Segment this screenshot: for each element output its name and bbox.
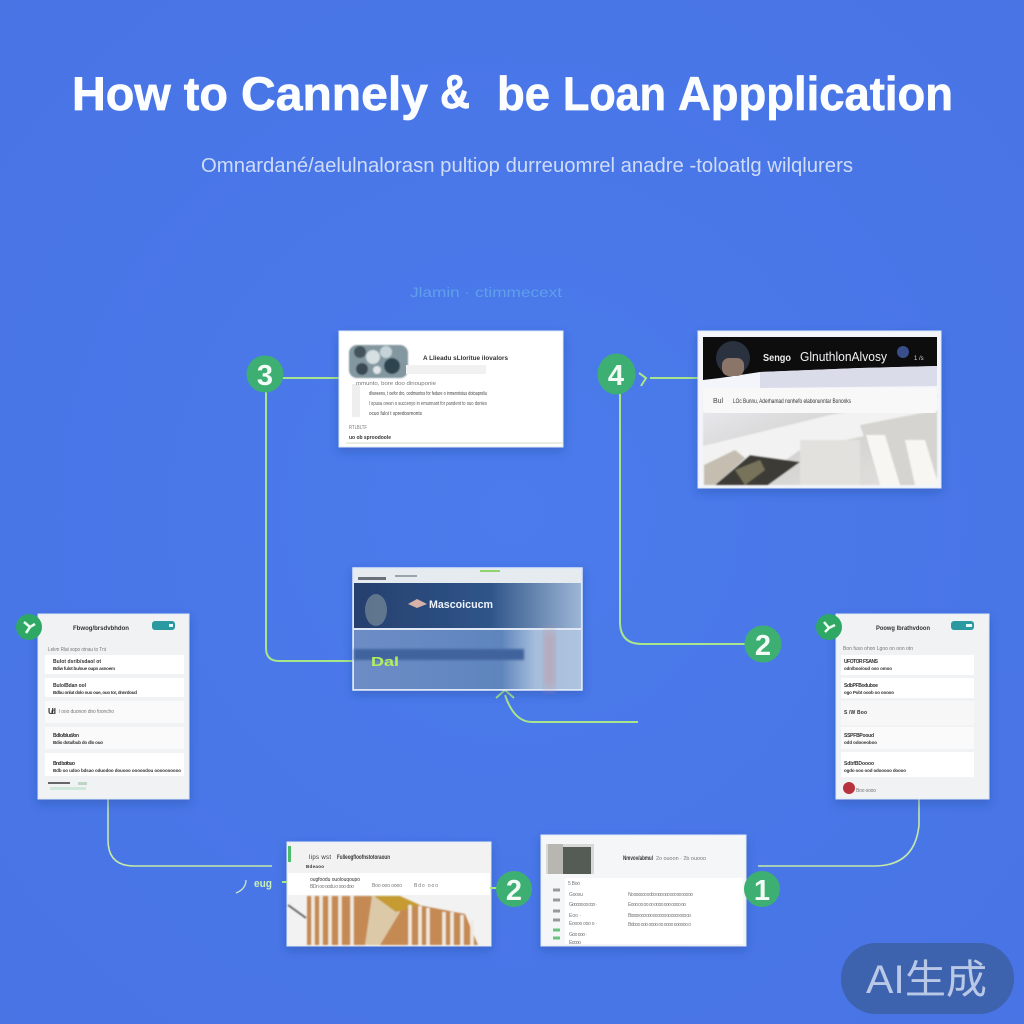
panel: bottom right table [541, 835, 746, 946]
rows [45, 655, 184, 790]
form rows: dloweens, t oefor dro, oodmuntos for fedure o inmenntoius dotoaproliu [369, 391, 487, 397]
green scribble label: Dal [371, 654, 399, 669]
text strip: LOc Bunnu, Aderhamad nonhefo elabonunntar Bononks [733, 398, 852, 405]
striped photo [288, 896, 478, 945]
step badge 2 bottom: 2 [506, 875, 522, 907]
header [843, 621, 974, 652]
table: Goosu [569, 892, 583, 898]
form rows [349, 381, 487, 441]
step badge 2 right: 2 [755, 630, 771, 662]
title: & [440, 65, 470, 118]
step badge 4 [598, 354, 646, 394]
rows: SdbfBDoooo [844, 761, 874, 767]
panel: right checklist [836, 614, 989, 799]
check badge right [816, 614, 842, 640]
header: Fulleogfloofnstotoraoun [337, 855, 390, 861]
AI badge: AI生成 [866, 958, 987, 1002]
title: be [497, 67, 550, 120]
panel: left checklist [38, 614, 189, 799]
step badge 3 [246, 356, 284, 392]
table: 5 Boo [568, 881, 580, 887]
panel: step 3 form [339, 331, 563, 447]
dark banner [703, 337, 937, 388]
form rows: l opusa oresn o succenyo in emunnant for pandent to ouo dontes [369, 401, 487, 407]
info strip: BDn oo oodu o ooo doo [310, 884, 354, 890]
rows: Bulo/Bdan ool [53, 683, 87, 689]
step badge 1: 1 [754, 875, 770, 907]
connector: center panel arrow [496, 690, 638, 722]
panel: center banner [353, 568, 582, 690]
rows: Bulot dsrib/sdaol ot [53, 659, 101, 665]
step badge 1 [744, 871, 780, 907]
red avatar [843, 782, 855, 794]
info strip: Boo ooo oooo [372, 883, 402, 889]
bottom connectors between panels [282, 882, 746, 888]
table: No oooooo o doo ooo ooo ooo oo ooo oo [628, 892, 693, 898]
header [288, 846, 390, 869]
rows: Bdiw fulot bu/oue oupn asnoem [53, 666, 115, 671]
table: Boooo ooo ooo oo oooo oo oooo ooo oo [628, 913, 691, 919]
table: Eooo oo oo oo oooo ooo oooo oo [628, 902, 686, 908]
dark banner: Sengo [763, 353, 791, 364]
text strip [703, 388, 937, 413]
rows: Ud [48, 707, 56, 716]
table: Bdooo ooo oooo oo oooo oooooo o [628, 922, 691, 928]
step badge 3: 3 [257, 360, 273, 392]
text strip: Bul [713, 398, 723, 405]
rows: odd odooeoboo [844, 740, 877, 745]
header: Lekm Rlat sopo otnau to Tnt [48, 647, 107, 653]
dark banner: 1 /s [914, 356, 924, 362]
panel: step 4 photo [698, 331, 941, 488]
title: Loan [563, 67, 666, 120]
grey stripe [406, 365, 486, 374]
panel heading: A Llieadu sLloritue ilovalors [423, 356, 509, 362]
table: Eoo · [569, 913, 581, 919]
lower band [354, 630, 581, 689]
form rows: ocuo fuloi t spredosmonts [369, 411, 422, 417]
table: Gooooo oo ooo · [569, 902, 597, 908]
info strip: ougfoodu ouolouqoupo [310, 877, 360, 883]
rows: Bdio dotu/bub do dlo ouo [53, 740, 103, 745]
connector: left panel to bottom [108, 798, 272, 866]
step badge 2 bottom [496, 871, 532, 907]
rows: Bnd bofouo [53, 761, 75, 767]
faint section label: Jlamin · ctimmecext [410, 284, 562, 300]
rows: ogo Pobt ooob oo ooooo [844, 690, 894, 695]
dark banner: Mascoicucm [429, 599, 493, 611]
rows: Bdb oo udoo bdsao oduodoo douooo ooooodou oooooooooo [53, 768, 181, 773]
header: Bdeaoo [306, 864, 324, 869]
table [553, 878, 743, 946]
info strip: Bdo ooo [414, 883, 438, 889]
heading [623, 856, 706, 862]
header: lips wst [309, 855, 331, 861]
heading: 2o ouoon · 2b ouooo [656, 856, 706, 862]
form rows: uo ob sproodoole [349, 435, 391, 441]
rows [841, 655, 974, 794]
browser bar [354, 569, 581, 583]
title: Cannely [241, 67, 428, 120]
title: How to [72, 67, 228, 120]
title [72, 65, 953, 120]
connector: step 3 to center panel [266, 378, 362, 661]
header: Fbwog/brsdvbhdon [73, 626, 129, 632]
rows: Boo oooo [856, 788, 876, 794]
scribble label [236, 878, 272, 893]
form rows: RTLBLTF [349, 425, 367, 431]
panel: bottom left photo [287, 842, 491, 946]
rows: SSPFBPooud [844, 733, 874, 739]
dark banner [354, 583, 581, 628]
rows: odn/boo/oud oso omoo [844, 666, 892, 671]
check badge left [16, 614, 42, 640]
header [48, 621, 175, 653]
rows: SdbPFBoduboe [844, 683, 878, 689]
rows: l ooo duonon dno fooncho [59, 709, 114, 715]
header: Bon fuso ohon Lgoo on oon otn [843, 646, 913, 652]
subtitle: Omnardané/aelulnalorasn pultiop durreuomrel anadre -toloatlg wilqlurers [201, 155, 853, 177]
rows: UFOTOR FSANS [844, 659, 879, 665]
dark banner: GlnuthlonAlvosy [800, 349, 887, 364]
table: Eoooo ooo o · [569, 921, 597, 927]
title: Appplication [678, 67, 953, 120]
form rows: mmunto, bore doo dinouponie [356, 381, 436, 387]
rows: Bdbu onlut dolo ouo oue, ouo tor, dnnrdoud [53, 690, 137, 695]
info strip [288, 873, 490, 895]
rows: Bdlo/blud/on [53, 733, 79, 739]
table: Goo ooo · [569, 932, 587, 938]
connector: step 4 to right panel and step 2 [620, 378, 746, 644]
AI badge [841, 943, 1014, 1014]
heading: Nmvov/abmul [623, 856, 653, 862]
thumbnail photo [546, 844, 594, 874]
step badge 2 right [744, 626, 782, 662]
table: Eoooo [569, 940, 581, 946]
photo [703, 395, 937, 485]
step badge 4: 4 [608, 360, 624, 392]
header: Poowg lbrathvdoon [876, 626, 930, 632]
thumbnail image [349, 345, 408, 378]
rows: S /W Boo [844, 710, 867, 716]
scribble label: eug [254, 878, 272, 890]
rows: ogdo ooo ood odooooo doooo [844, 768, 906, 773]
connector: right panel to step 1 [758, 798, 919, 866]
